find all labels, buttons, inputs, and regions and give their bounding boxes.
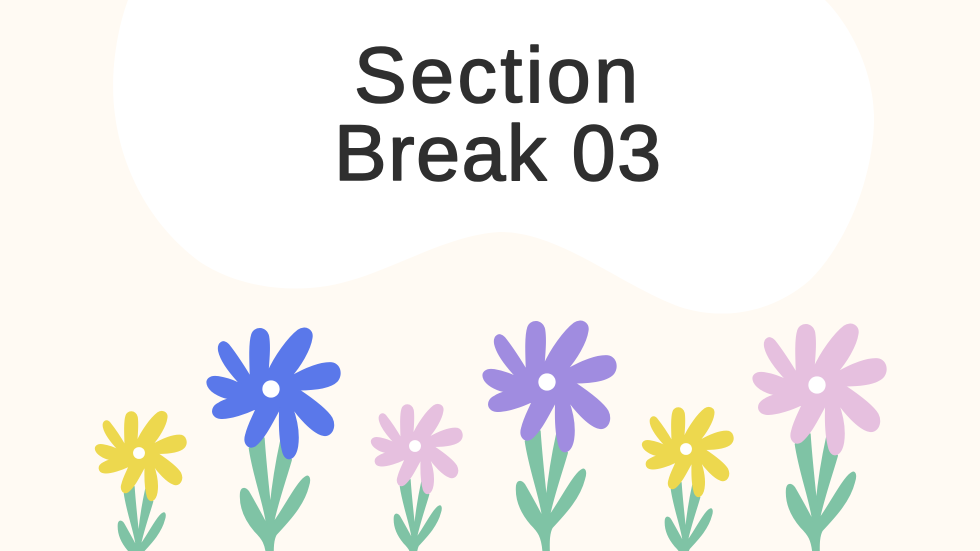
white blob panel [113,0,874,314]
flower: large pink [753,324,886,551]
flower: large purple [483,321,616,551]
title [334,30,661,197]
title: Section [354,30,638,119]
flower: small yellow left [95,412,186,551]
title: Break 03 [334,108,661,197]
flower: large blue [207,328,340,551]
flower: small yellow right [642,408,733,551]
flower: small pink [371,405,462,551]
